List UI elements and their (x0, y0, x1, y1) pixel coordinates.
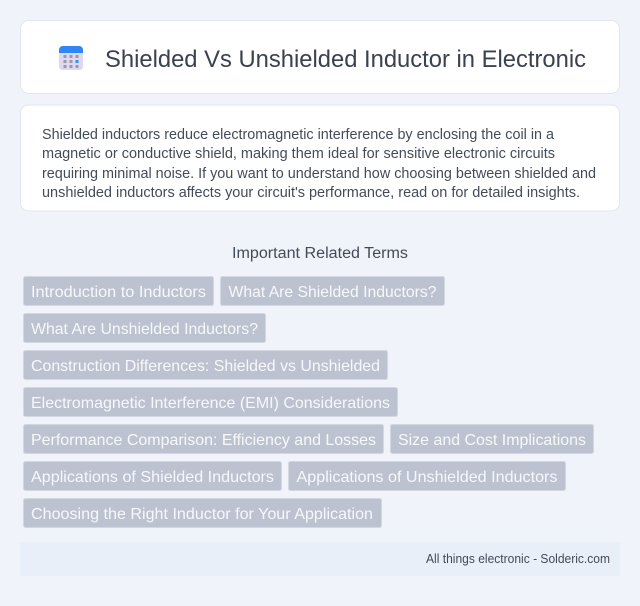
tag: EMI Considerations: Electromagnetic Interference (EMI) Considerations (31, 395, 390, 412)
header panel (20, 20, 620, 94)
tag: Construction Differences (24, 350, 388, 380)
tag: What Are Unshielded Inductors?: What Are Unshielded Inductors? (31, 321, 258, 338)
tag: Choosing the Right Inductor: Choosing the Right Inductor for Your Application (31, 506, 373, 523)
tag: Applications of Unshielded Inductors: Applications of Unshielded Inductors (296, 469, 558, 486)
tag: Introduction to Inductors (24, 276, 214, 306)
tag: What Are Shielded Inductors?: What Are Shielded Inductors? (228, 284, 437, 301)
tag: Introduction to Inductors: Introduction to Inductors (31, 284, 206, 301)
description text: requiring minimal noise. If you want to understand how choosing between shielded and (42, 166, 596, 182)
tag: EMI Considerations (24, 388, 398, 416)
description text: magnetic or conductive shield, making them ideal for sensitive electronic circuits (42, 146, 555, 162)
tag: Construction Differences: Construction Differences: Shielded vs Unshielded (31, 358, 380, 375)
tag: Performance Comparison: Performance Comparison: Efficiency and Losses (31, 432, 376, 449)
tag: What Are Shielded Inductors? (220, 276, 444, 306)
tag: Applications of Shielded Inductors: Applications of Shielded Inductors (31, 469, 274, 486)
tag: Size and Cost Implications (390, 424, 594, 454)
heading: related terms: Important Related Terms (232, 245, 408, 262)
tag: Applications of Shielded Inductors (24, 462, 282, 490)
tag: Performance Comparison (24, 424, 384, 454)
tag: Size and Cost Implications: Size and Cost Implications (398, 432, 586, 449)
icon: calendar (59, 46, 83, 70)
tag: Applications of Unshielded Inductors (288, 462, 566, 490)
footer (20, 542, 620, 576)
tag: Choosing the Right Inductor (24, 498, 382, 528)
description text: unshielded inductors affects your circuit's performance, read on for detailed insights. (42, 185, 580, 201)
footer: All things electronic - Solderic.com (426, 552, 610, 566)
title: Shielded Vs Unshielded Inductor in Electronic (105, 46, 586, 73)
description text: Shielded inductors reduce electromagnetic interference by enclosing the coil in a (42, 127, 554, 143)
tag: What Are Unshielded Inductors? (24, 314, 266, 342)
panel: description (20, 105, 620, 211)
description text (42, 127, 596, 201)
